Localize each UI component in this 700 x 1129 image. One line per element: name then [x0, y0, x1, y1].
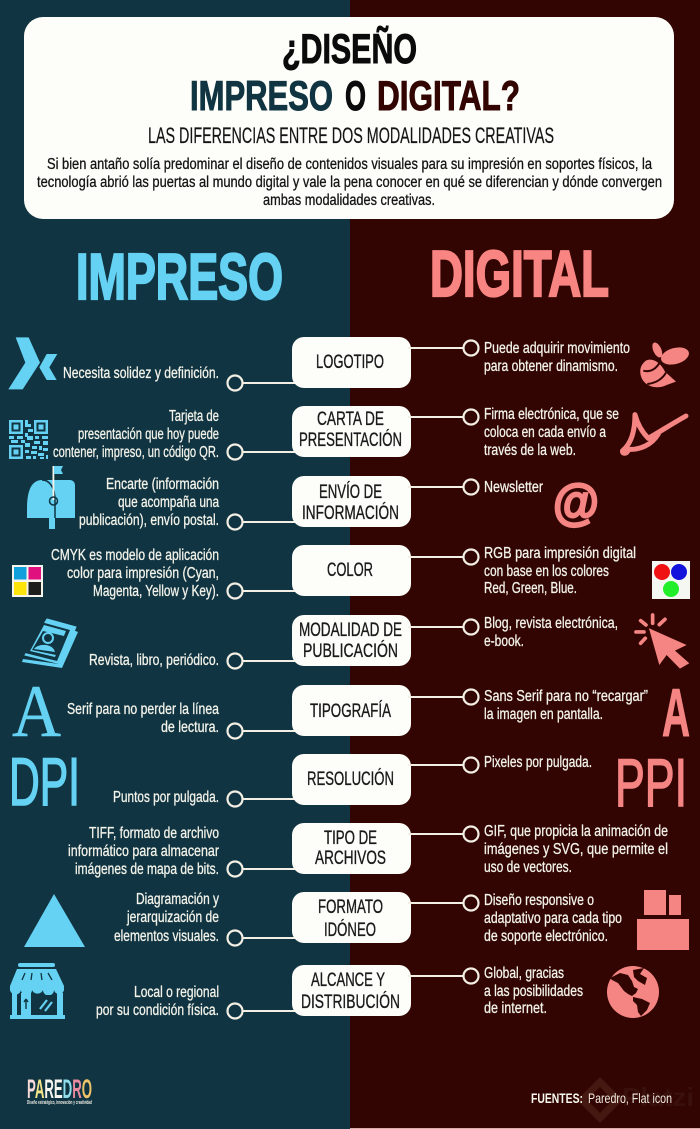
category box: INFORMACIÓN: [302, 502, 399, 524]
category box: ENVÍO DE: [319, 482, 382, 503]
right connector: [408, 826, 478, 842]
watermark: [582, 1082, 694, 1118]
impreso text: de lectura.: [161, 719, 219, 736]
icon: cmyk swatches: [12, 565, 43, 597]
icon: mailbox: [27, 466, 75, 529]
digital text: [484, 615, 618, 650]
category box: FORMATO: [318, 897, 383, 918]
category box: [292, 406, 411, 457]
row: modalidad de publicacion: [22, 615, 689, 669]
category box: [292, 823, 411, 874]
digital text: [484, 823, 668, 876]
impreso text: contener, impreso, un código QR.: [53, 444, 219, 461]
category box: [292, 892, 411, 943]
digital text: de internet.: [484, 1000, 547, 1017]
row: tipo de archivos: [68, 823, 668, 878]
impreso text: CMYK es modelo de aplicación: [51, 547, 219, 564]
category box: [292, 545, 411, 596]
digital text: uso de vectores.: [484, 859, 572, 876]
icon: at sign: @: [553, 474, 599, 530]
title: ¿DISEÑO: [282, 25, 417, 72]
footer logo: paredro: PAREDRO: [27, 1074, 92, 1104]
impreso text: elementos visuales.: [114, 928, 219, 945]
digital text: Pixeles por pulgada.: [484, 754, 592, 771]
impreso text: [79, 476, 219, 529]
impreso text: [67, 701, 219, 736]
sources: FUENTES:: [531, 1090, 583, 1106]
icon: rgb circles: [652, 561, 690, 599]
category box: ALCANCE Y: [311, 970, 385, 991]
right connector: [408, 620, 478, 634]
impreso text: que acompaña una: [118, 494, 219, 511]
digital text: a las posibilidades: [484, 983, 583, 1000]
impreso text: jerarquización de: [126, 909, 219, 926]
icon: blocks: [637, 890, 689, 950]
digital text: para obtener dinamismo.: [484, 358, 618, 375]
category box: [292, 685, 411, 736]
left connector: [228, 514, 296, 530]
icon: storefront: [10, 963, 65, 1019]
digital text: adaptativo para cada tipo: [484, 910, 622, 927]
impreso text: Diagramación y: [136, 891, 219, 908]
icon: signature: [623, 415, 686, 453]
icon: globe: [607, 966, 659, 1018]
icon: bee: [640, 341, 691, 387]
digital text: [484, 688, 648, 723]
digital text: través de la web.: [484, 442, 576, 459]
row: alcance y distribucion: [10, 963, 659, 1019]
icon: chevron logo: [8, 337, 57, 389]
digital text: [484, 965, 583, 1017]
category box: [292, 337, 411, 388]
icon: qr code: [9, 420, 48, 459]
icon: cursor click: [636, 615, 689, 669]
digital text: [484, 892, 622, 945]
left connector: [228, 792, 296, 806]
digital text: e-book.: [484, 633, 524, 650]
digital text: con base en los colores: [484, 563, 609, 580]
impreso text: presentación que hoy puede: [78, 426, 219, 443]
icon: dpi: DPI: [9, 744, 80, 820]
row: color: [12, 545, 690, 600]
left connector: [228, 930, 296, 946]
heading: impreso: IMPRESO: [76, 240, 283, 313]
category box: MODALIDAD DE: [299, 620, 402, 641]
impreso text: [53, 408, 219, 461]
category box: RESOLUCIÓN: [307, 768, 394, 790]
icon: magazine: [22, 619, 78, 668]
title: IMPRESO: [190, 72, 333, 119]
category box: PRESENTACIÓN: [299, 429, 402, 451]
category box: IDÓNEO: [324, 919, 376, 941]
digital text: [484, 545, 636, 597]
title: O: [345, 72, 366, 119]
category box: [292, 615, 411, 666]
digital text: Global, gracias: [484, 965, 564, 982]
category box: TIPO DE: [324, 828, 377, 849]
category box: ARCHIVOS: [315, 848, 386, 869]
left connector: [228, 444, 296, 460]
left connector: [228, 862, 296, 876]
right connector: [408, 340, 478, 356]
category box: DISTRIBUCIÓN: [301, 991, 400, 1013]
intro paragraph: [37, 156, 662, 209]
impreso text: [114, 891, 219, 945]
digital text: Sans Serif para no “recargar”: [484, 688, 648, 705]
heading: digital: DIGITAL: [430, 237, 609, 310]
category box: [292, 476, 411, 527]
right connector: [408, 690, 478, 704]
row: logotipo: [8, 337, 691, 390]
impreso text: [51, 547, 219, 600]
category box: CARTA DE: [317, 409, 384, 430]
footer logo: paredro: Diseño estratégico, innovación y creatividad: [27, 1100, 92, 1106]
row: tipografia: [12, 671, 690, 753]
category box: TIPOGRAFÍA: [310, 701, 391, 722]
left connector: [228, 1004, 296, 1018]
impreso text: [68, 825, 220, 878]
category box: LOGOTIPO: [316, 352, 384, 373]
category box: [292, 754, 411, 805]
category box: COLOR: [327, 560, 373, 581]
header panel: [24, 17, 674, 219]
right connector: [408, 896, 478, 910]
digital text: Red, Green, Blue.: [484, 580, 577, 597]
digital text: Firma electrónica, que se: [484, 406, 619, 423]
icon: serif letter A: A: [12, 671, 61, 753]
sources: Paredro, Flat icon: [588, 1090, 672, 1106]
impreso text: informático para almacenar: [68, 843, 220, 860]
impreso text: imágenes de mapa de bits.: [75, 861, 219, 878]
sources: [531, 1090, 672, 1106]
title: [190, 25, 520, 119]
watermark: Platzi: [622, 1082, 694, 1112]
right connector: [408, 410, 478, 424]
row: formato idoneo: [24, 890, 689, 950]
left connector: [228, 584, 296, 598]
row: envio de informacion: [27, 466, 599, 530]
impreso text: publicación), envío postal.: [79, 512, 219, 529]
category box: PUBLICACIÓN: [303, 640, 398, 662]
digital text: [484, 340, 630, 375]
intro paragraph: ambas modalidades creativas.: [263, 192, 435, 209]
impreso text: Necesita solidez y definición.: [63, 365, 219, 382]
impreso text: TIFF, formato de archivo: [89, 825, 219, 842]
left connector: [228, 724, 296, 738]
digital text: coloca en cada envío a: [484, 424, 606, 441]
impreso text: Revista, libro, periódico.: [89, 652, 219, 669]
digital text: Newsletter: [484, 479, 544, 496]
title: DIGITAL?: [377, 72, 520, 119]
row: resolucion: [9, 744, 687, 821]
digital text: RGB para impresión digital: [484, 545, 636, 562]
left connector: [228, 654, 296, 668]
left connector: [228, 376, 296, 390]
category box: [292, 965, 411, 1016]
impreso text: Local o regional: [134, 984, 219, 1001]
right connector: [408, 758, 478, 772]
row: carta de presentacion: [9, 406, 686, 461]
impreso text: Encarte (información: [106, 476, 219, 493]
right connector: [408, 480, 478, 494]
digital text: de soporte electrónico.: [484, 928, 608, 945]
digital text: [484, 406, 619, 459]
digital text: la imagen en pantalla.: [484, 706, 603, 723]
icon: triangle: [24, 894, 85, 947]
impreso text: Puntos por pulgada.: [113, 789, 219, 806]
right connector: [408, 550, 478, 564]
impreso text: Magenta, Yellow y Key).: [93, 583, 219, 600]
digital text: Puede adquirir movimiento: [484, 340, 630, 357]
digital text: Diseño responsive o: [484, 892, 594, 909]
impreso text: [96, 984, 219, 1019]
impreso text: Tarjeta de: [169, 408, 219, 425]
impreso text: Serif para no perder la línea: [67, 701, 219, 718]
right connector: [408, 968, 478, 984]
impreso text: color para impresión (Cyan,: [67, 565, 219, 582]
digital text: Blog, revista electrónica,: [484, 615, 618, 632]
impreso text: por su condición física.: [96, 1002, 219, 1019]
